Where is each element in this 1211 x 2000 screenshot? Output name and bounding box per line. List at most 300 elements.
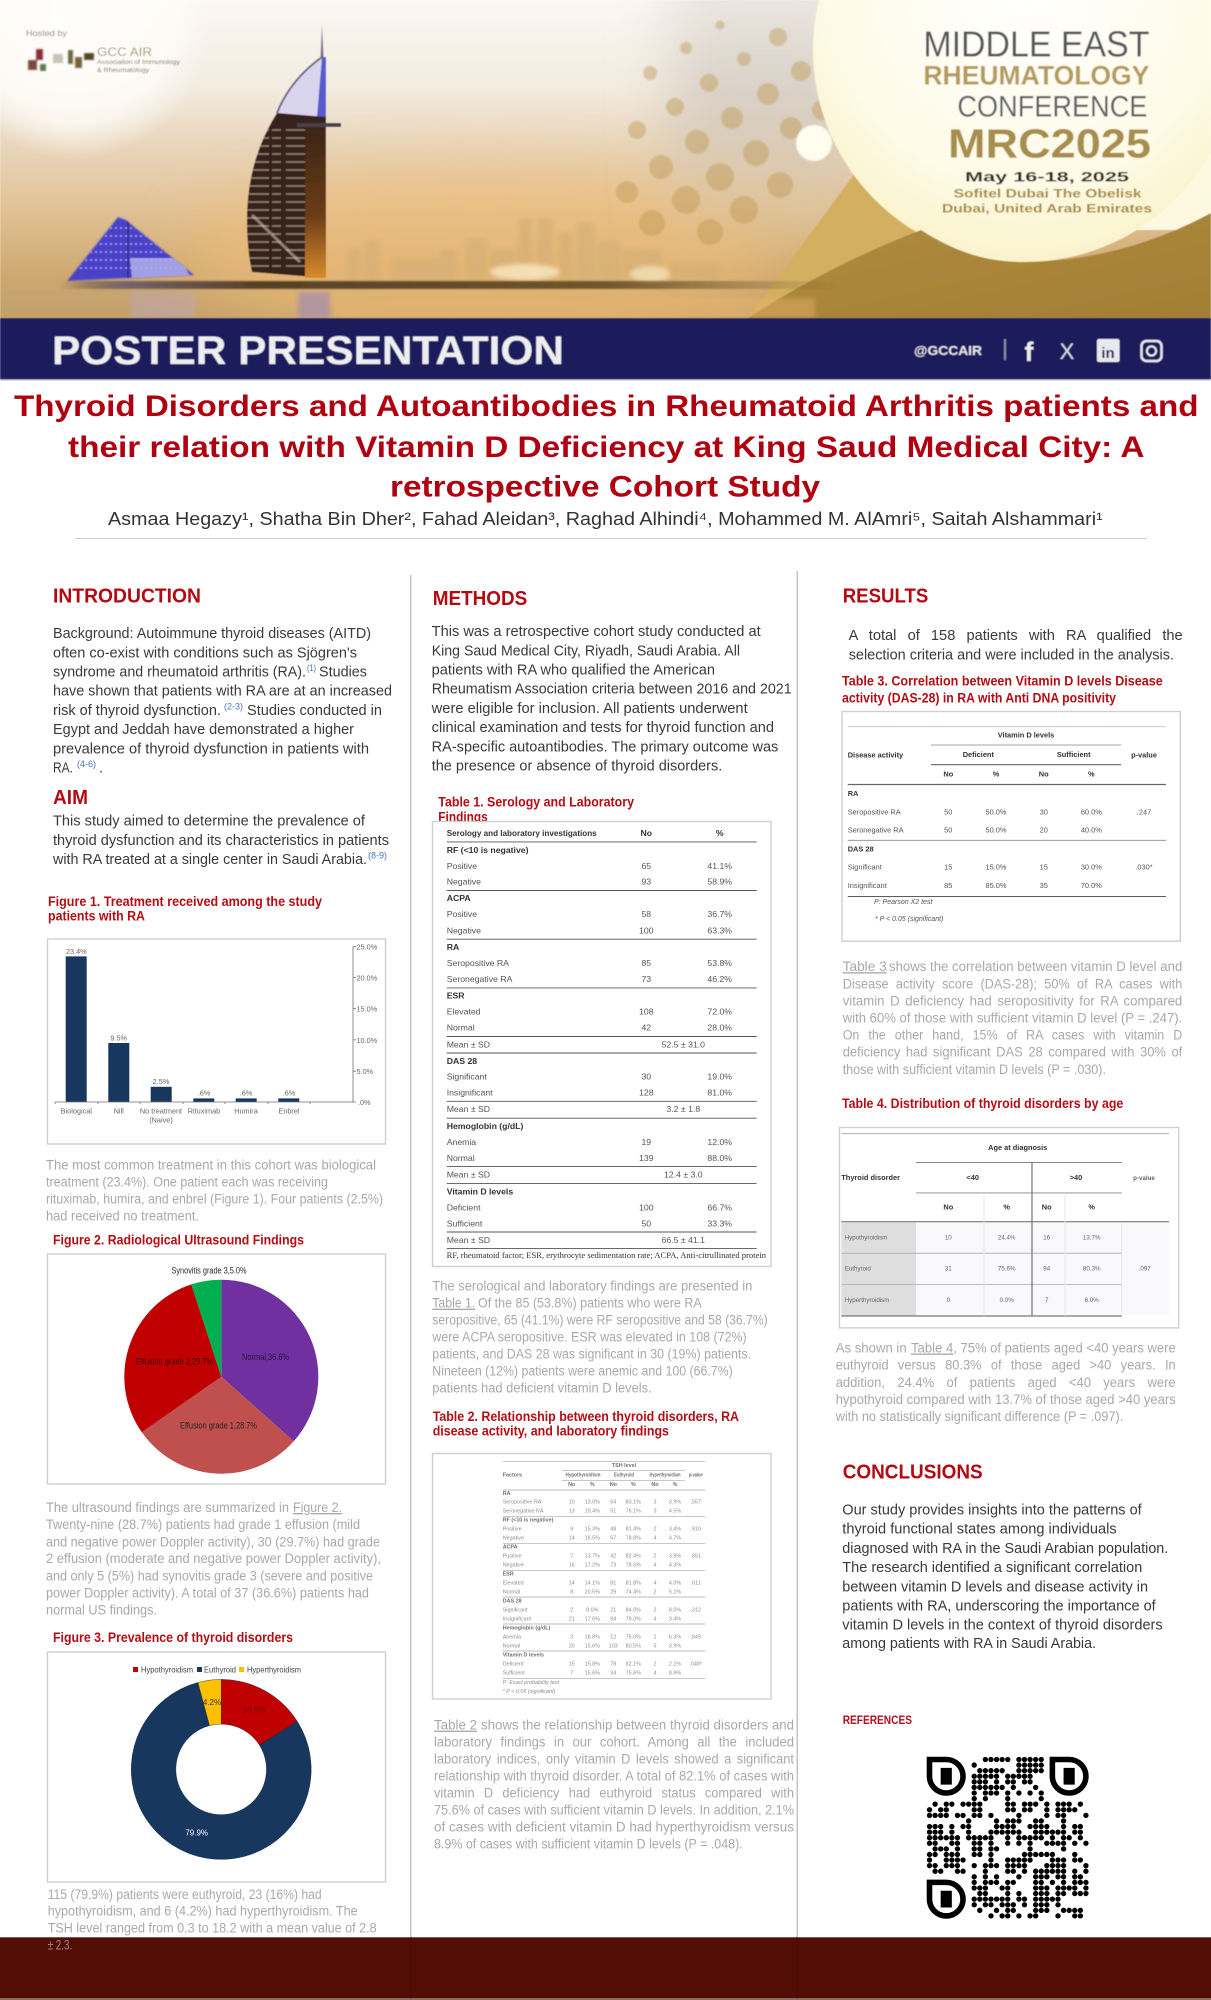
heading: table 1: Table 1. Serology and Laboratory — [438, 795, 634, 810]
table 1 rows: 63.3% — [707, 925, 732, 935]
text: introduction body: Egypt and Jeddah have demonstrated a higher — [53, 722, 354, 738]
table 3 rows: Insignificant — [848, 881, 887, 890]
table 2 rows: Anemia — [503, 1634, 521, 1640]
table 3 rows: 50.0% — [986, 826, 1007, 835]
table 1 rows: 108 — [639, 1007, 654, 1017]
text: results body — [849, 628, 1183, 664]
table 2 header: No — [610, 1482, 618, 1488]
table 2 rows: 19.4% — [585, 1509, 600, 1515]
axis and value labels: 15.0% — [356, 1005, 378, 1014]
table 3 rows: 50 — [944, 808, 952, 816]
text: table 4 caption: euthyroid versus 80.3% of those aged >40 years. In — [836, 1358, 1176, 1373]
heading: figure 1: patients with RA — [48, 909, 145, 924]
table 4 shaded cells — [841, 1222, 1169, 1316]
table 3 rows: 15.0% — [986, 863, 1007, 872]
text: figure 2 caption: Twenty-nine (28.7%) patients had grade 1 effusion (mild — [46, 1517, 360, 1532]
axis and value labels: 23.4% — [66, 947, 87, 956]
text: methods body: RA-specific autoantibodies. The primary outcome was — [432, 739, 778, 755]
table 2 rows: 3.4% — [669, 1616, 681, 1622]
table 2 rows: Seronegative RA — [503, 1509, 544, 1515]
QR finder patterns — [929, 1759, 1086, 1916]
text: aim body: with RA treated at a single center in Saudi Arabia. — [52, 852, 367, 868]
pie labels: Synovitis grade 3,5.0% — [172, 1266, 246, 1276]
text: results body: selection criteria and were included in the analysis. — [849, 648, 1174, 664]
table 4 rows: 7 — [1045, 1297, 1049, 1304]
pie labels: Normal,36.6% — [242, 1352, 289, 1362]
table 3 rows: .247 — [1137, 808, 1151, 816]
QR code — [929, 1759, 1086, 1916]
text: table 2 caption — [434, 1718, 794, 1852]
table 3 header: Disease activity — [848, 751, 904, 760]
table 1 rows: 12.4 ± 3.0 — [664, 1170, 703, 1180]
table 2 rows: Positive — [503, 1527, 522, 1533]
text: table 3 caption: On the other hand, 15% of RA cases with vitamin D — [843, 1028, 1183, 1043]
text: conclusions body: The research identified a significant correlation — [842, 1560, 1142, 1576]
text: results body: A total of 158 patients with RA qualified the — [849, 628, 1183, 644]
axis and value labels: Nill — [114, 1107, 124, 1116]
text: introduction body — [53, 626, 392, 776]
table 2 rows: RA — [503, 1491, 511, 1497]
table 2 rows: 21 — [569, 1616, 575, 1622]
donut segments — [131, 1679, 311, 1859]
text: figure 2 caption: normal US findings. — [46, 1602, 157, 1618]
table 2 rows: 82.4% — [626, 1554, 641, 1560]
text: table 3 caption — [842, 959, 1183, 1077]
heading: table 3: Table 3. Correlation between Vitamin D levels Disease — [842, 673, 1163, 688]
table 2 rows: 18.8% — [585, 1634, 600, 1640]
table 3 header: No — [943, 770, 954, 779]
table 4 rows: 10 — [945, 1234, 952, 1241]
table 2 rows: 3.9% — [669, 1500, 681, 1506]
axis and value labels: (Naive) — [149, 1116, 173, 1124]
table 1 rows: Negative — [447, 877, 481, 887]
table 2 rows: 81.4% — [626, 1527, 641, 1533]
table 2 rows: 76.1% — [626, 1509, 641, 1515]
heading: references: REFERENCES — [843, 1715, 912, 1727]
table 1 rows: Positive — [447, 909, 477, 919]
text: figure 2 caption — [46, 1500, 381, 1618]
table 2 rules — [503, 1462, 705, 1679]
table 1 rows: 100 — [639, 925, 654, 935]
table 2 rows: 4.0% — [669, 1580, 681, 1586]
table 4 header: Thyroid disorder — [841, 1173, 900, 1182]
text: table 2 caption: relationship with thyroid disorder. A total of 82.1% of cases with — [434, 1768, 794, 1784]
heading: results: RESULTS — [843, 586, 928, 608]
text: poster presentation: POSTER PRESENTATION — [52, 329, 564, 373]
table 4 rows: 31 — [945, 1266, 952, 1273]
QR data modules — [929, 1759, 1086, 1916]
table 3 header: p-value — [1131, 751, 1157, 760]
table 2 rows: 7 — [570, 1670, 573, 1676]
text: figure 3 caption: hypothyroidism, and 6 (4.2%) had hyperthyroidism. The — [48, 1903, 358, 1918]
table 3 rows: 85 — [944, 881, 952, 890]
table 2 rows: 78.8% — [626, 1535, 641, 1541]
table 1 rows: 50 — [641, 1218, 651, 1228]
text: introduction body: syndrome and rheumatoid arthritis (RA). — [53, 664, 306, 680]
cream circle — [813, 0, 1211, 262]
conference date and venue: Dubai, United Arab Emirates — [942, 203, 1152, 215]
table 1 rows: 41.1% — [707, 861, 732, 871]
table 1 rows: RA — [447, 942, 460, 952]
table 2 rows: 67 — [610, 1535, 616, 1541]
table 4 rows: .097 — [1139, 1266, 1151, 1273]
table 2 rows: 79.0% — [626, 1616, 641, 1622]
table 2 rows: 20.5% — [585, 1589, 600, 1595]
axis and value labels: Humira — [234, 1107, 259, 1116]
text: methods body: King Saud Medical City, Riyadh, Saudi Arabia. All — [432, 643, 740, 659]
table 2 rows — [503, 1491, 703, 1695]
table 2 header: Hyperthyroidism — [650, 1472, 681, 1478]
heading: table 3: activity (DAS-28) in RA with Anti DNA positivity — [842, 691, 1116, 706]
table 2 rows: Significant — [503, 1608, 528, 1614]
table 3 rows: Seronegative RA — [848, 826, 904, 835]
table 1 rows: Insignificant — [447, 1087, 493, 1097]
heading: table 2 — [433, 1409, 739, 1439]
decorative halftone dots — [616, 20, 832, 245]
text: table 4 caption: , 75% of patients aged <40 years were — [953, 1340, 1176, 1356]
table 3 rows: .030* — [1135, 863, 1153, 872]
table 2 rows: Negative — [503, 1562, 524, 1568]
table 2 rows: 14 — [569, 1580, 575, 1586]
table 2 rows: 6.3% — [669, 1634, 681, 1640]
table 2 rows: 15.6% — [585, 1643, 600, 1649]
text: table 3 caption: Disease activity score (DAS-28); 50% of RA cases with — [843, 976, 1182, 991]
text: figure 3 caption: TSH level ranged from 0.3 to 18.2 with a mean value of 2.8 — [48, 1920, 377, 1935]
logo: GCC AIR: & Rheumatology — [97, 68, 149, 74]
table 4 header: No — [1042, 1203, 1052, 1212]
text: table 1 caption: patients had deficient vitamin D levels. — [432, 1381, 652, 1396]
table 4 rows: 6.0% — [1085, 1297, 1099, 1304]
text: table 3 caption: deficiency had significant DAS 28 compared with 30% of — [843, 1045, 1183, 1060]
text: conclusions body — [842, 1502, 1168, 1652]
text: introduction body: Background: Autoimmune thyroid diseases (AITD) — [53, 626, 371, 642]
text: conclusions body: between vitamin D levels and disease activity in — [842, 1579, 1148, 1595]
text: figure 3 caption — [48, 1887, 377, 1953]
authors: Asmaa Hegazy¹, Shatha Bin Dher², Fahad Aleidan³, Raghad Alhindi⁴, Mohammed M. AlAmri⁵, Saitah Alshammari¹ — [108, 509, 1103, 529]
table 1 rows — [447, 845, 732, 1245]
dark gold wave — [748, 213, 1211, 318]
text: introduction body: (1) — [307, 663, 316, 673]
table 2 rows: Insignificant — [503, 1616, 532, 1622]
text: table 1 caption: were ACPA seropositive. ESR was elevated in 108 (72%) — [431, 1330, 747, 1345]
table 2 rows: 73 — [610, 1562, 616, 1568]
table 1 rows: Vitamin D levels — [447, 1187, 513, 1197]
text: conclusions body: Our study provides insights into the patterns of — [842, 1502, 1143, 1518]
text: methods body — [431, 624, 792, 774]
table 2 rows: 15 — [569, 1662, 575, 1668]
text: table 2 caption: Table 2 — [434, 1718, 477, 1733]
legend — [133, 1664, 301, 1674]
table 3 rows: Significant — [848, 863, 882, 872]
table rules — [447, 842, 757, 1249]
table 2 rows: 15.8% — [585, 1662, 600, 1668]
table 1 rows: 19 — [641, 1137, 651, 1147]
table 2 rows: Sufficient — [503, 1670, 525, 1676]
table 2 rows: 81.8% — [626, 1580, 641, 1586]
text: table 1 caption: Nineteen (12%) patients were anemic and 100 (66.7%) — [432, 1364, 733, 1379]
table 3 rows — [848, 789, 1153, 923]
text: figure 2 caption: power Doppler activity). A total of 37 (36.6%) patients had — [46, 1586, 369, 1601]
table 2 rows: 3 — [654, 1509, 656, 1515]
table 2 rows: 78.5% — [626, 1562, 641, 1568]
text: table 1 caption: The serological and laboratory findings are presented in — [432, 1279, 752, 1294]
table 2 rows: 1 — [654, 1634, 656, 1640]
conference date and venue: May 16-18, 2025 — [965, 169, 1129, 185]
text: table 1 caption: patients, and DAS 28 was significant in 30 (19%) patients. — [432, 1347, 751, 1362]
panel: table 1 serology — [432, 822, 771, 1266]
table 3 rows: 50.0% — [986, 808, 1007, 816]
donut labels: 79.9% — [185, 1828, 208, 1837]
table 1 rows: 19.0% — [707, 1071, 732, 1081]
table 4 rows: 13.7% — [1083, 1234, 1101, 1241]
panel: table 4 thyroid by age — [840, 1128, 1179, 1328]
axis and value labels: 10.0% — [356, 1036, 378, 1045]
table 4 header: Age at diagnosis — [988, 1143, 1047, 1152]
table 4 rows: Euthyroid — [845, 1266, 871, 1273]
table 2 rows: 16.5% — [585, 1535, 600, 1541]
table 1 rows: 81.0% — [707, 1087, 732, 1097]
table 2 rows: 84.0% — [626, 1608, 641, 1614]
text: table 4 caption: with no statistically significant difference (P = .097). — [835, 1409, 1123, 1424]
table 3 rows: DAS 28 — [848, 844, 874, 853]
text: table 4 caption: addition, 24.4% of patients aged <40 years were — [836, 1375, 1176, 1390]
table 2 rows: .851 — [690, 1554, 701, 1560]
table 2 rows: 34 — [610, 1670, 616, 1676]
table 2 rows: 2 — [570, 1608, 573, 1614]
table 2 rows: DAS 28 — [503, 1599, 522, 1605]
table 2 rows: Deficient — [503, 1662, 524, 1668]
table 2 rows: P: Exact probability test — [503, 1680, 560, 1686]
text: table 2 caption: 8.9% of cases with sufficient vitamin D levels (P = .048). — [434, 1836, 743, 1852]
axis and value labels: 25.0% — [356, 942, 378, 952]
text: conclusions body: thyroid functional states among individuals — [842, 1522, 1117, 1538]
table 2 rows: 5.1% — [669, 1589, 681, 1595]
banner: conference header — [0, 0, 1211, 381]
table 2 rows: RF (<10 is negative) — [503, 1518, 554, 1524]
table 2 rows: 4 — [654, 1670, 656, 1676]
table 3 header: % — [1088, 770, 1095, 779]
table 3 rows: 70.0% — [1081, 881, 1102, 890]
axis and value labels: .0% — [358, 1098, 371, 1107]
table 2 rows: 13.0% — [585, 1500, 600, 1506]
table 1 rows: 58 — [641, 909, 651, 919]
legend: Hypothyroidism — [141, 1664, 193, 1674]
text: table 3 caption: Table 3 — [843, 959, 887, 974]
table 2 rows: ESR — [503, 1571, 514, 1577]
axis and value labels: 20.0% — [356, 973, 378, 982]
text: figure 1 caption: The most common treatment in this cohort was biological — [46, 1157, 376, 1172]
table 3 header: % — [993, 770, 1000, 779]
axes — [55, 947, 356, 1104]
table 2 rows: 15.6% — [585, 1670, 600, 1676]
table 2 rows: 48 — [610, 1527, 616, 1533]
table 2 rows: .849 — [690, 1634, 701, 1640]
text: introduction body: Studies — [319, 664, 367, 680]
table 2 rows: Seropositive RA — [503, 1500, 542, 1506]
table 2 header: Hypothyroidism — [566, 1472, 601, 1478]
axis and value labels: .6% — [283, 1089, 296, 1098]
text: figure 1 caption: treatment (23.4%). One patient each was receiving — [46, 1174, 328, 1189]
title: their relation with Vitamin D Deficiency at King Saud Medical City: A — [68, 431, 1144, 464]
table 3 header — [848, 731, 1157, 779]
axis and value labels: 5.0% — [356, 1067, 374, 1076]
text: table 1 caption: Table 1. — [432, 1296, 475, 1311]
conference name: MIDDLE EAST — [923, 24, 1149, 65]
table 1 rows: ACPA — [447, 893, 471, 903]
panel: table 2 thyroid relationship — [432, 1454, 771, 1699]
table 2 rows: 8.0% — [586, 1608, 599, 1614]
table 1 rows: 93 — [641, 877, 651, 887]
table 1 rows: Negative — [447, 925, 481, 935]
table 4 header: No — [943, 1203, 954, 1212]
table 1 rows: Seropositive RA — [447, 958, 509, 968]
table 4 rows: 0 — [947, 1297, 951, 1304]
table 2 rows: 4 — [654, 1616, 656, 1622]
table 3 rows: 15 — [1040, 863, 1048, 872]
table 2 rows: 3 — [654, 1500, 656, 1506]
title: retrospective Cohort Study — [390, 470, 820, 503]
table 2 rows: 3.9% — [669, 1643, 681, 1649]
text: table 1 caption: Of the 85 (53.8%) patients who were RA — [478, 1296, 702, 1311]
icon: Jumeirah hotel sail — [60, 217, 200, 281]
text: figure 1 caption — [46, 1157, 383, 1224]
donut labels: 16.0% — [243, 1706, 265, 1714]
table 2 rows: 81 — [610, 1580, 616, 1586]
text: hosted by: Hosted by — [26, 29, 67, 38]
table 3 rows: Seropositive RA — [848, 808, 901, 816]
donut labels — [185, 1698, 265, 1837]
table 1 rows: Mean ± SD — [447, 1170, 490, 1180]
heading: table 3 — [842, 673, 1163, 706]
table 2 rows: Normal — [503, 1589, 520, 1595]
legend: Euthyroid — [204, 1664, 236, 1674]
waterfront — [60, 281, 840, 289]
table 1 rows: 36.7% — [707, 909, 732, 919]
table 2 rows: 75.6% — [626, 1670, 641, 1676]
axis and value labels: 2.5% — [153, 1077, 170, 1086]
panel: figure 2 pie chart — [48, 1254, 386, 1484]
table 2 header: % — [673, 1482, 678, 1488]
heading: conclusions: CONCLUSIONS — [843, 1462, 983, 1484]
table 2 rows: 16 — [569, 1562, 575, 1568]
table 4 rows: 94 — [1043, 1266, 1051, 1273]
text: figure 3 caption: ± 2.3. — [48, 1938, 72, 1953]
table 2 rows: .611 — [691, 1580, 701, 1586]
text: introduction body: have shown that patients with RA are at an increased — [53, 684, 392, 700]
table 2 rows: 4 — [654, 1535, 656, 1541]
table 2 rows: 8.9% — [669, 1670, 681, 1676]
text: table 2 caption: 75.6% of cases with sufficient vitamin D levels. In addition, 2.1% — [434, 1802, 794, 1818]
table 1 rows: ESR — [447, 991, 465, 1001]
table 4 header: >40 — [1070, 1173, 1082, 1182]
table 3 rows: 35 — [1040, 881, 1048, 890]
table 2 rows: 82.1% — [626, 1662, 641, 1668]
heading: aim: AIM — [53, 787, 88, 809]
table 2 rows: 74.4% — [626, 1589, 641, 1595]
table 2 rows: Normal — [503, 1643, 520, 1649]
table 2 rows: Hemoglobin (g/dL) — [503, 1625, 551, 1631]
text: methods body: clinical examination and tests for thyroid function and — [432, 720, 774, 736]
text: aim body: (8-9) — [368, 850, 387, 860]
table 1 rows: 46.2% — [707, 974, 732, 984]
axis and value labels: Enbrel — [278, 1107, 300, 1116]
text: table 3 caption: shows the correlation between vitamin D level and — [889, 959, 1182, 974]
table 2 rows: .048* — [689, 1662, 703, 1668]
axis and value labels: Rituximab — [188, 1107, 220, 1116]
table 3 rows: P: Pearson X2 test — [874, 899, 933, 906]
table 4 header — [841, 1143, 1155, 1212]
text: table 1 caption — [431, 1279, 768, 1396]
legend: Hyperthyroidism — [247, 1664, 301, 1674]
table 2 rows: 21 — [610, 1608, 616, 1614]
axis and value labels: .6% — [240, 1089, 253, 1098]
table 1 rows: 66.5 ± 41.1 — [662, 1235, 705, 1245]
table 1 rows: Significant — [447, 1071, 487, 1081]
table 1 rows: RF (<10 is negative) — [447, 845, 529, 855]
table 2 rows: 75.0% — [626, 1634, 641, 1640]
table 2 rows: 3.4% — [669, 1527, 681, 1533]
table 1 rows: 33.3% — [707, 1218, 732, 1228]
pie labels: Effusion grade 2,29.7% — [136, 1356, 213, 1366]
table 2 header: Factors — [503, 1473, 522, 1479]
table 2 rows: 80.5% — [626, 1643, 641, 1649]
table 1 rows: Sufficient — [447, 1218, 483, 1228]
table 1 rows: Mean ± SD — [447, 1040, 490, 1050]
conference name: MRC2025 — [948, 121, 1151, 167]
table 1 rows: 73 — [641, 974, 651, 984]
pie slices — [124, 1280, 318, 1474]
text: social handle: @GCCAIR — [914, 343, 983, 358]
table 1 rows: Mean ± SD — [447, 1104, 490, 1114]
table 3 rows: RA — [848, 789, 859, 798]
table 1 rows: 30 — [641, 1071, 651, 1081]
table 4 rows: 80.3% — [1083, 1266, 1101, 1273]
table 1 rows: DAS 28 — [447, 1056, 477, 1066]
table 2 rows: 83.1% — [626, 1500, 641, 1506]
table 2 rows: 2 — [654, 1554, 656, 1560]
text: table 2 caption: laboratory findings in our cohort. Among all the included — [434, 1734, 794, 1750]
table 2 rows: 2 — [654, 1662, 656, 1668]
table 1 rows: 72.0% — [707, 1007, 732, 1017]
table 2 rows: .312 — [690, 1608, 701, 1614]
table 3 rows: * P < 0.05 (significant) — [875, 916, 943, 923]
table 1 rows: Positive — [447, 861, 477, 871]
table 1 rows: 88.0% — [707, 1153, 732, 1163]
conference date and venue: Sofitel Dubai The Obelisk — [954, 188, 1142, 200]
table 2 rows: 10 — [569, 1500, 575, 1506]
text: introduction body: prevalence of thyroid dysfunction in patients with — [53, 741, 369, 757]
table 4 rows — [845, 1234, 1151, 1304]
table 2 rows: 2 — [654, 1608, 656, 1614]
text: table 3 caption: vitamin D deficiency had seropositivity for RA compared — [843, 994, 1182, 1009]
heading: table 4: Table 4. Distribution of thyroid disorders by age — [842, 1096, 1124, 1111]
conference name: RHEUMATOLOGY — [923, 60, 1149, 90]
table 2 header: Euthyroid — [614, 1472, 634, 1478]
logo: GCC AIR: GCC AIR — [97, 45, 152, 59]
table 2 rows: 14.1% — [585, 1580, 600, 1586]
conference name — [923, 24, 1151, 167]
axis and value labels: .6% — [198, 1089, 211, 1098]
table 2 rows: 14 — [569, 1535, 575, 1541]
table 1 rows: 128 — [639, 1087, 654, 1097]
table 2 rows: 4.5% — [669, 1509, 681, 1515]
heading: figure 1 — [48, 894, 322, 924]
table 3 rows: 15 — [944, 863, 952, 872]
table 3 header: No — [1039, 770, 1049, 779]
text: introduction body: (4-6) — [77, 759, 96, 769]
text: methods body: patients with RA who qualified the American — [432, 662, 715, 678]
table 4 rows: Hypothyroidism — [845, 1234, 887, 1241]
